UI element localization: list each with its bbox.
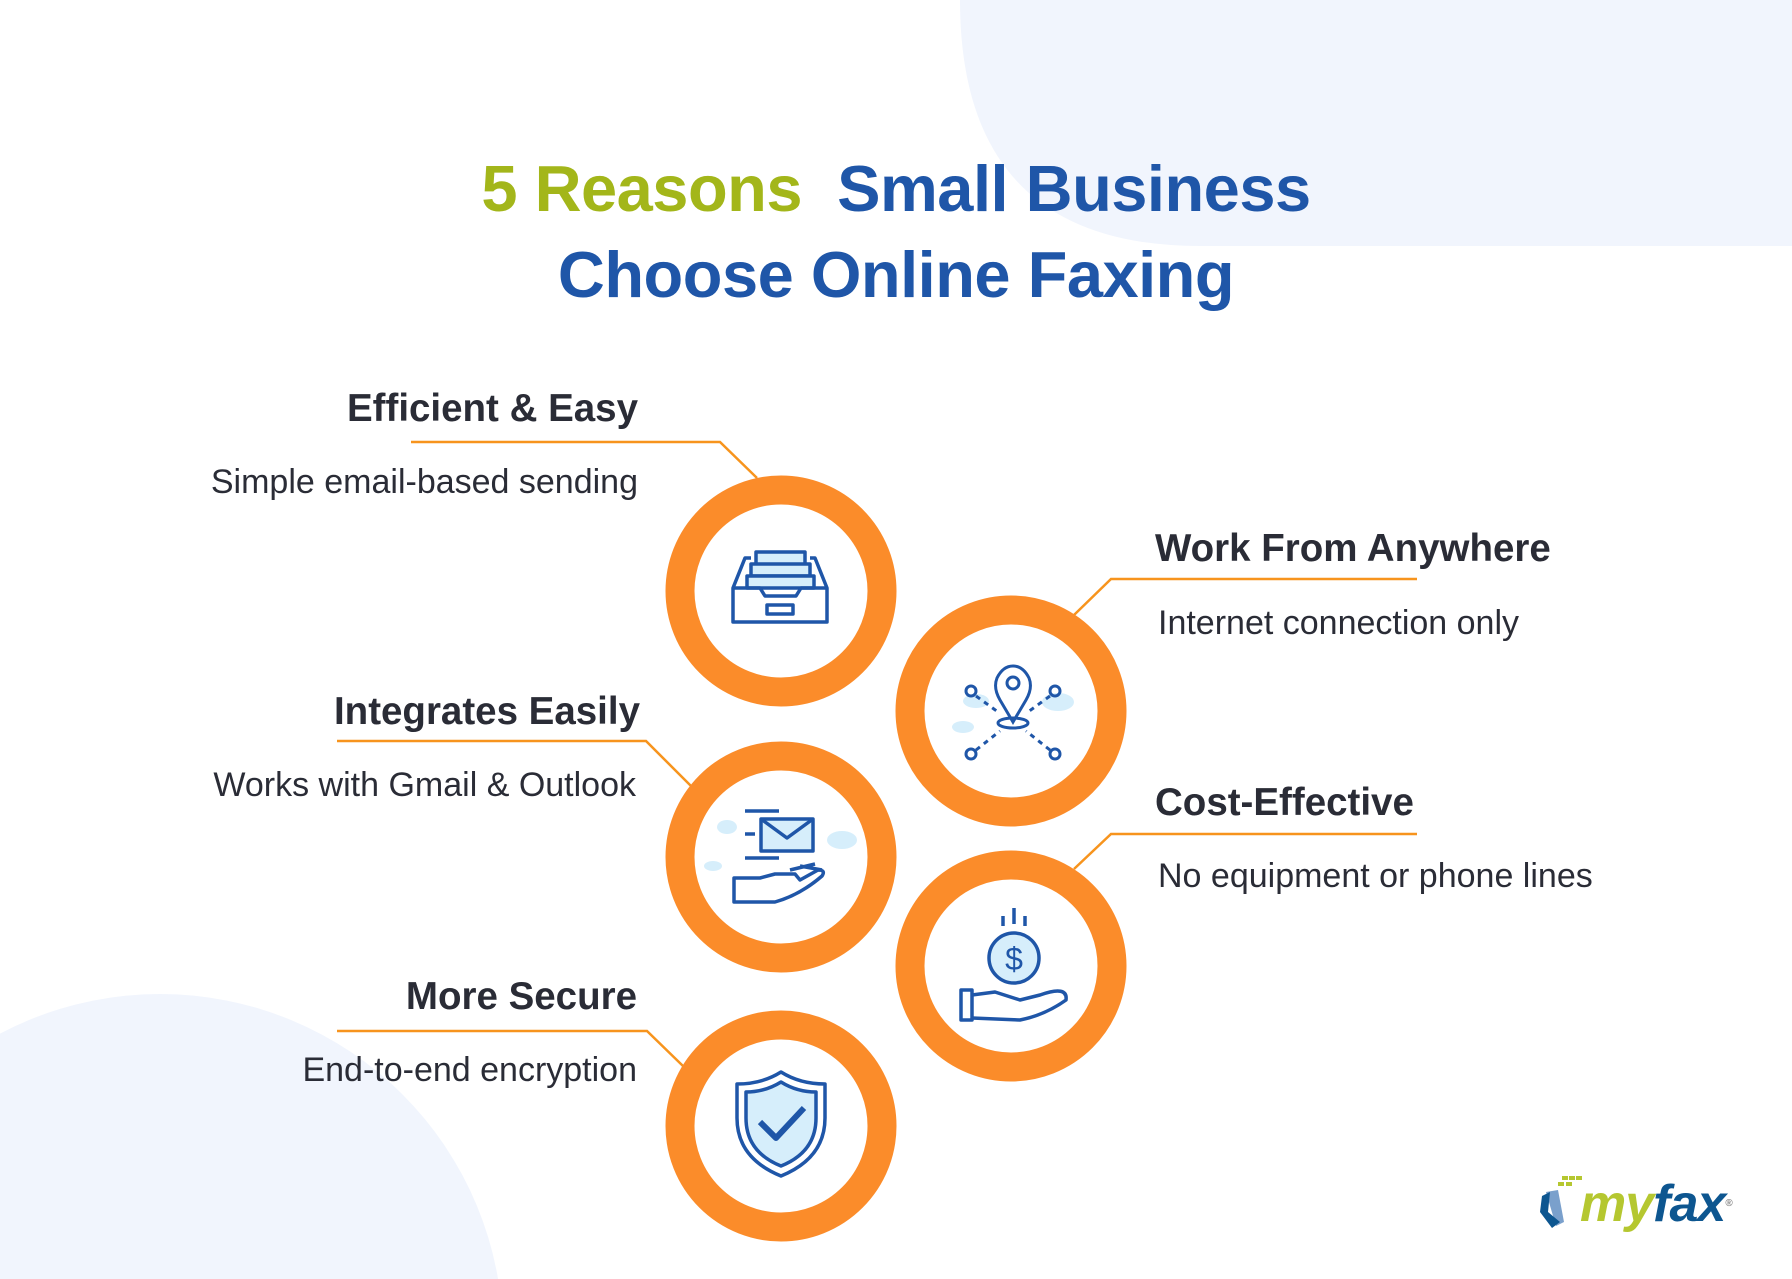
connector lines bbox=[337, 442, 1417, 1066]
icon: hand with envelope bbox=[680, 756, 882, 958]
text: No equipment or phone lines: No equipment or phone lines bbox=[1158, 857, 1593, 895]
icon: shield check bbox=[680, 1025, 882, 1227]
heading: Efficient & Easy: Efficient & Easy bbox=[347, 387, 638, 430]
text: Simple email-based sending: Simple email-based sending bbox=[211, 463, 638, 501]
text: End-to-end encryption: End-to-end encryption bbox=[302, 1051, 637, 1089]
title: 5 Reasons Small Business bbox=[481, 152, 1311, 225]
text: Internet connection only: Internet connection only bbox=[1158, 604, 1519, 642]
icon: inbox tray bbox=[680, 490, 882, 692]
heading: Cost-Effective: Cost-Effective bbox=[1155, 781, 1414, 824]
title: Choose Online Faxing bbox=[558, 238, 1234, 311]
icon: hand with coin: $ bbox=[1005, 941, 1023, 977]
heading: Integrates Easily: Integrates Easily bbox=[334, 690, 640, 733]
text: Works with Gmail & Outlook: Works with Gmail & Outlook bbox=[213, 766, 636, 804]
icon: hand with coin bbox=[910, 865, 1112, 1067]
heading: More Secure: More Secure bbox=[406, 975, 637, 1018]
title bbox=[481, 152, 1311, 311]
heading: Work From Anywhere: Work From Anywhere bbox=[1155, 527, 1551, 570]
logo: myfax: myfax® bbox=[1580, 1175, 1732, 1233]
icon: location network bbox=[910, 610, 1112, 812]
